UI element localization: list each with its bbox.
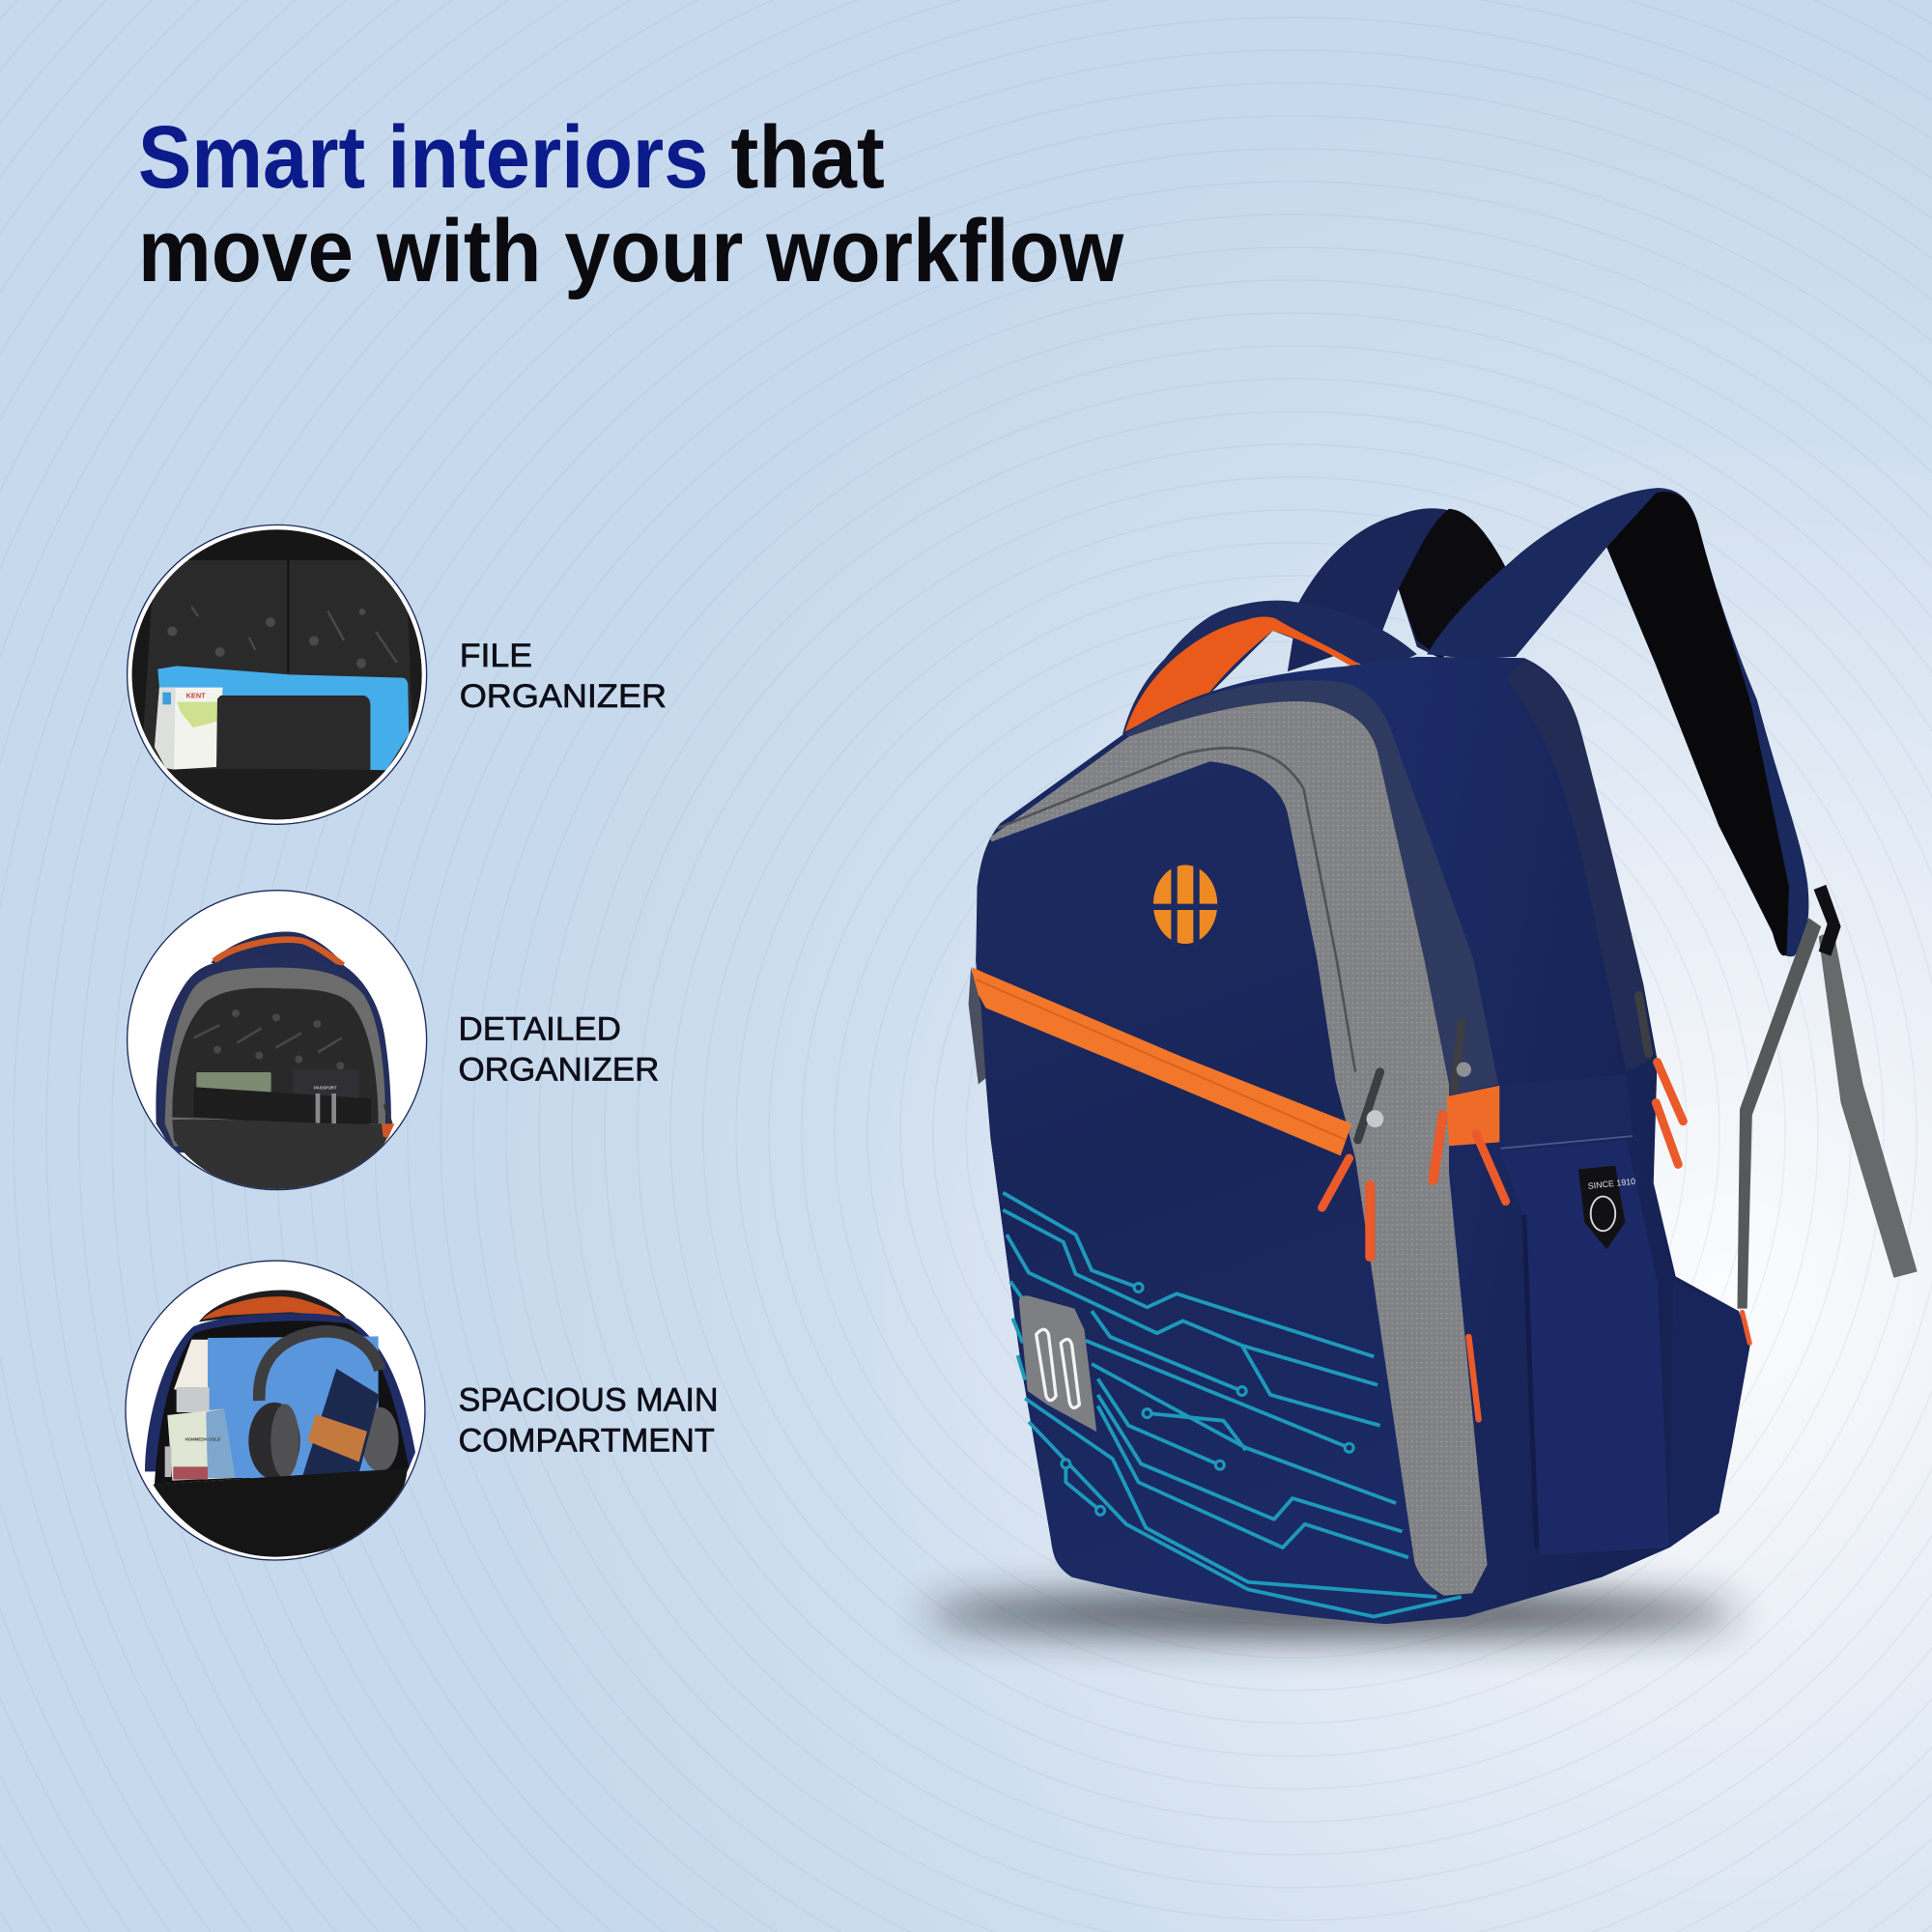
far shoulder strap: [1288, 508, 1508, 671]
backpack shadow: [924, 1592, 1737, 1636]
panel: detailed organizer photo: PASSPORT: [314, 1086, 337, 1091]
orange side webbing: [1446, 1086, 1499, 1146]
panel: file organizer photo: [126, 522, 432, 828]
main zipper band: [1125, 680, 1498, 1096]
brand tag: SINCE 1910: [1587, 1177, 1636, 1191]
label: detailed organizer: [458, 1011, 659, 1089]
reflective patch: [1019, 1295, 1096, 1432]
panel: spacious main compartment photo: [126, 1261, 425, 1560]
illustration: backpack: [969, 488, 1918, 1624]
panel: detailed organizer photo: [128, 891, 427, 1190]
logo: orange emblem: [1151, 860, 1220, 949]
label: file organizer: [460, 638, 667, 715]
title: that: [730, 108, 885, 207]
label: spacious main compartment: [458, 1381, 719, 1460]
brand tag: [1578, 1166, 1636, 1249]
side pocket: [1501, 1140, 1669, 1555]
label: file organizer: ORGANIZER: [460, 678, 667, 715]
zipper pulls: [1322, 1062, 1749, 1419]
top handle: [1122, 601, 1417, 734]
panel: spacious main compartment photo: HOMMEDH COLD: [185, 1437, 220, 1442]
label: detailed organizer: DETAILED: [458, 1011, 621, 1048]
label: spacious main compartment: SPACIOUS MAIN: [458, 1381, 719, 1418]
title: [138, 108, 1124, 300]
webbing straps: [1737, 918, 1821, 1309]
front panel: [976, 761, 1441, 1624]
title: move with your workflow: [138, 202, 1124, 300]
circuit lines: [1003, 1193, 1462, 1616]
label: detailed organizer: ORGANIZER: [458, 1052, 659, 1089]
orange zipper: [972, 967, 1351, 1155]
bag body: [976, 657, 1750, 1624]
side zipper band: [1506, 661, 1651, 1072]
label: file organizer: FILE: [460, 638, 532, 674]
panel: file organizer photo: KENT: [186, 692, 206, 700]
grey mesh band: [989, 701, 1488, 1596]
label: spacious main compartment: COMPARTMENT: [458, 1423, 715, 1460]
near shoulder strap: [1427, 488, 1808, 956]
left zipper pull: [969, 967, 985, 1084]
title: Smart interiors: [138, 108, 708, 207]
